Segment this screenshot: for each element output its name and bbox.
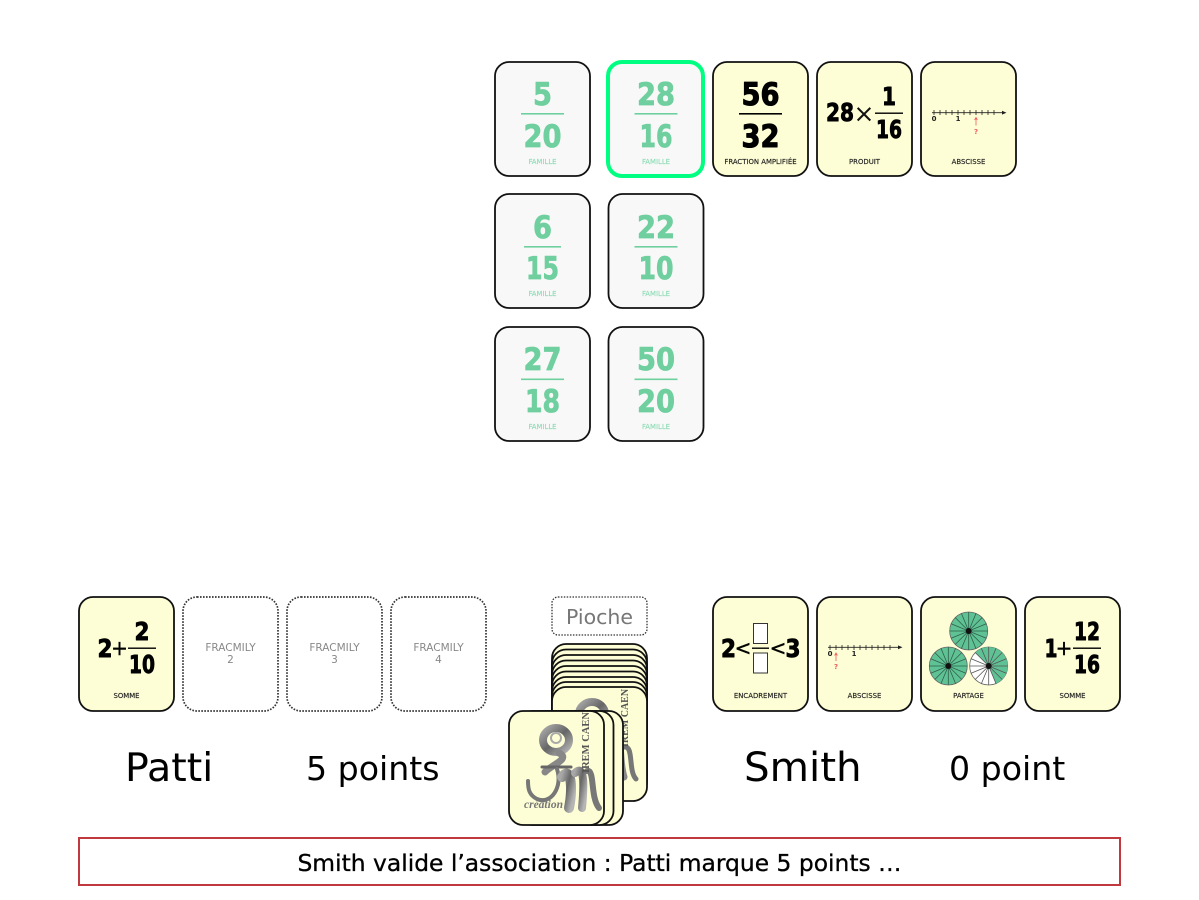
card: produit 28 x 1/16: 16: [876, 115, 902, 144]
card: 22/10 famille: 22: [637, 210, 675, 246]
card: somme 1 + 12/16: 1: [1044, 634, 1058, 663]
card: somme 2 + 2/10: SOMME: [113, 692, 140, 700]
card: somme 1 + 12/16: +: [1056, 636, 1072, 660]
card: 28/16 famille highlighted: 28: [637, 77, 675, 113]
card: partage: PARTAGE: [953, 692, 984, 700]
card: 22/10 famille: [608, 194, 704, 308]
number line: [932, 110, 1003, 115]
card: somme 2 + 2/10: [79, 597, 174, 711]
card: fraction amplifiee 56/32: 32: [742, 119, 780, 155]
card: abscisse: 1: [852, 650, 857, 658]
card: 28/16 famille highlighted: 16: [640, 119, 672, 155]
number line: [828, 645, 899, 650]
card: somme 2 + 2/10: 2: [98, 634, 112, 663]
card: 50/20 famille: 20: [637, 384, 675, 420]
empty slot 4: FRACMILY: [413, 642, 464, 654]
pie bottom left: [929, 647, 967, 685]
card: produit 28 x 1/16: PRODUIT: [849, 158, 881, 166]
logo: IREM Caen creation: [524, 712, 599, 811]
empty slot 4: 4: [435, 654, 442, 666]
card: abscisse: ABSCISSE: [952, 158, 985, 166]
card: somme 2 + 2/10: 10: [129, 650, 155, 679]
card: abscisse: [921, 62, 1016, 176]
card: produit 28 x 1/16: ×: [854, 99, 874, 128]
card: 28/16 famille highlighted: [608, 62, 703, 176]
card: 6/15 famille: 15: [526, 251, 559, 287]
card: encadrement: <: [770, 636, 786, 660]
logo: IREM Caen creation: IREM CAEN: [581, 712, 592, 773]
card: 5/20 famille: 5: [533, 77, 552, 113]
card: fraction amplifiee 56/32: FRACTION AMPLIFIÉE: [724, 157, 797, 166]
empty slot 2: [183, 597, 278, 711]
card: produit 28 x 1/16: [817, 62, 912, 176]
draw pile label: [552, 597, 647, 635]
card: 6/15 famille: FAMILLE: [528, 290, 557, 298]
card: 5/20 famille: FAMILLE: [528, 158, 557, 166]
player hand deck: [509, 711, 623, 825]
card: abscisse: [817, 597, 912, 711]
draw pile label: Pioche: [566, 605, 633, 629]
card: somme 1 + 12/16: [1025, 597, 1120, 711]
card: produit 28 x 1/16: 28: [826, 98, 854, 127]
card: 6/15 famille: [495, 194, 590, 308]
card: 27/18 famille: FAMILLE: [528, 423, 557, 431]
player name: Patti: Patti: [125, 745, 213, 791]
card: abscisse: ABSCISSE: [848, 692, 881, 700]
card: somme 1 + 12/16: 16: [1074, 650, 1100, 679]
card: 5/20 famille: 20: [524, 119, 562, 155]
card: somme 2 + 2/10: 2: [134, 617, 150, 646]
card: produit 28 x 1/16: 1: [882, 82, 896, 111]
empty slot 3: [287, 597, 382, 711]
score: Smith: 0 point: [949, 749, 1065, 788]
card: abscisse: 1: [956, 115, 961, 123]
card: encadrement: 3: [786, 634, 800, 663]
player name: Smith: Smith: [744, 743, 862, 791]
card: encadrement: [713, 597, 808, 711]
card: 27/18 famille: [495, 327, 590, 441]
draw pile stack: [552, 644, 647, 801]
card: somme 2 + 2/10: +: [111, 636, 128, 660]
card: 5/20 famille: [495, 62, 590, 176]
card: fraction amplifiee 56/32: [713, 62, 808, 176]
card: 50/20 famille: FAMILLE: [642, 423, 670, 431]
card: abscisse: ?: [834, 663, 838, 671]
card: 27/18 famille: 18: [525, 384, 560, 420]
logo on pile card: IREM CAEN: [620, 688, 631, 747]
card: 6/15 famille: 6: [533, 210, 552, 246]
pie bottom right: [970, 647, 1008, 685]
card: 50/20 famille: [608, 327, 704, 441]
card: 28/16 famille highlighted: FAMILLE: [642, 158, 670, 166]
card: abscisse: 0: [828, 650, 833, 658]
card: 27/18 famille: 27: [524, 342, 562, 378]
card: encadrement: <: [735, 636, 751, 660]
empty slot 3: FRACMILY: [309, 642, 360, 654]
card: partage: [921, 597, 1016, 711]
message banner: [79, 838, 1120, 885]
card: 22/10 famille: 10: [638, 251, 674, 287]
empty slot 2: FRACMILY: [205, 642, 256, 654]
logo on pile card: [579, 688, 636, 779]
empty slot 3: 3: [331, 654, 338, 666]
card: 22/10 famille: FAMILLE: [642, 290, 670, 298]
score: Patti: 5 points: [306, 749, 440, 788]
empty slot 4: [391, 597, 486, 711]
card: somme 1 + 12/16: SOMME: [1059, 692, 1086, 700]
pie top: [950, 612, 988, 650]
card: encadrement: 2: [721, 634, 736, 663]
card: encadrement: ENCADREMENT: [734, 692, 788, 700]
logo: IREM Caen creation: création: [524, 799, 563, 811]
card: abscisse: 0: [932, 115, 937, 123]
card: fraction amplifiee 56/32: 56: [742, 77, 780, 113]
card: abscisse: ?: [974, 128, 978, 136]
empty slot 2: 2: [227, 654, 234, 666]
message banner: Smith valide l’association : Patti marque 5 points …: [297, 849, 902, 877]
card: somme 1 + 12/16: 12: [1074, 617, 1100, 646]
card: 50/20 famille: 50: [637, 342, 675, 378]
